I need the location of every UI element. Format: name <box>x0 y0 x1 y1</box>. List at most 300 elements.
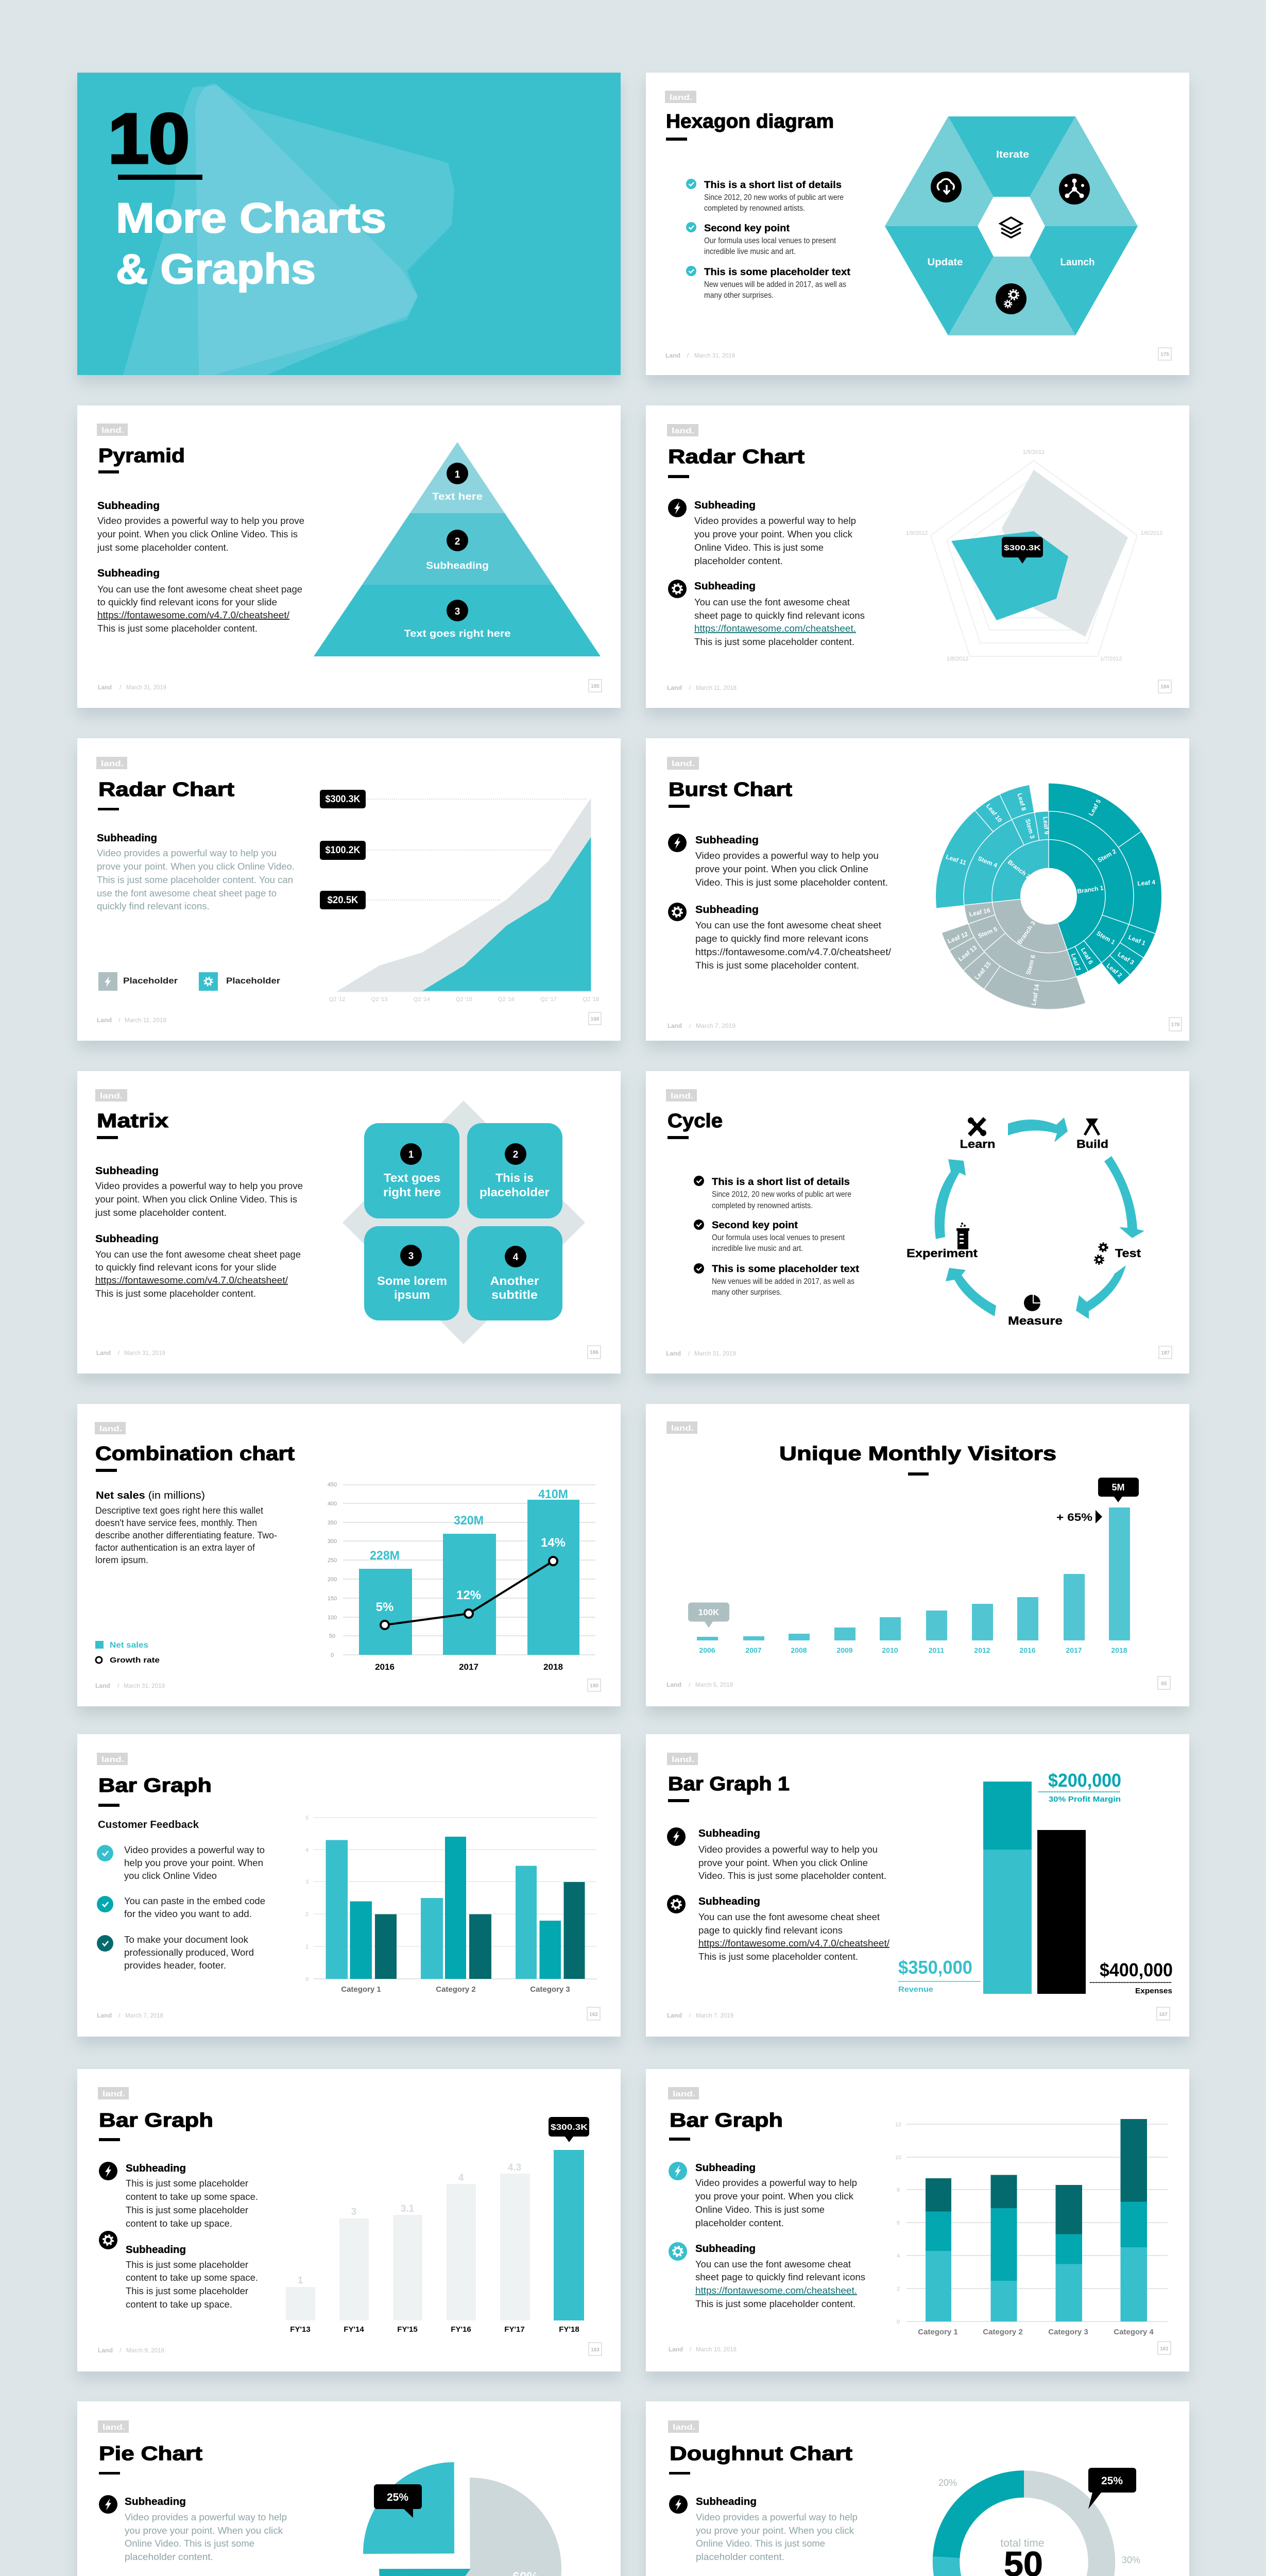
sunburst chart: Branch 3 <box>1016 920 1037 945</box>
text block 1 <box>698 1828 886 1881</box>
logo badge <box>95 1422 126 1434</box>
matrix diagram: 4 <box>513 1252 519 1263</box>
grouped bar chart: 4 <box>305 1847 309 1853</box>
footer <box>667 684 737 691</box>
panel: pyramid <box>77 405 621 708</box>
footer <box>669 2346 737 2353</box>
text block 2: https://fontawesome.com/cheatsheet. <box>694 623 856 634</box>
title underline <box>98 808 119 810</box>
footer <box>668 1022 735 1029</box>
text block 2: This is just some placeholder content. <box>694 636 854 647</box>
cover title: More Charts <box>116 195 386 242</box>
logo badge <box>667 1753 698 1765</box>
text block 1: Subheading <box>125 2496 186 2507</box>
text block 1: you prove your point. When you click <box>696 2525 854 2536</box>
bar chart: 2006 <box>699 1646 715 1654</box>
footer: / <box>119 684 122 691</box>
text block 1: Video provides a powerful way to help you <box>695 850 879 861</box>
logo badge: land. <box>672 1755 694 1764</box>
combo chart: 50 <box>329 1633 335 1639</box>
revenue and expenses bars: $200,000 <box>1048 1770 1121 1791</box>
icon: gear <box>668 580 687 598</box>
logo badge: land. <box>672 427 694 435</box>
footer: Land <box>667 684 682 691</box>
area chart: Q2 '12 <box>329 996 346 1003</box>
title underline <box>669 805 690 808</box>
logo badge <box>96 757 127 769</box>
text block 1: Video provides a powerful way to help <box>696 2512 858 2522</box>
list of details: many other surprises. <box>704 291 774 300</box>
radar chart: $300.3K <box>1004 544 1041 552</box>
list of details: This is some placeholder text <box>704 266 851 278</box>
sunburst chart: Leaf 12 <box>947 930 969 945</box>
text block 2: https://fontawesome.com/cheatsheet. <box>695 2285 857 2296</box>
text block 2: This is just some placeholder content. <box>695 2298 856 2309</box>
footer: March 31, 2019 <box>694 1350 736 1357</box>
matrix diagram: 3 <box>408 1251 414 1262</box>
text block: factor authentication is an extra layer of <box>95 1542 255 1553</box>
title: Bar Graph <box>99 2110 213 2131</box>
logo badge <box>98 2087 129 2099</box>
text block 2 <box>695 904 892 971</box>
grouped bar chart: 3 <box>305 1879 309 1885</box>
text block: prove your point. When you click Online Video. <box>97 861 295 872</box>
title underline <box>669 2138 690 2141</box>
page number <box>588 1346 601 1359</box>
logo badge <box>97 423 128 436</box>
stacked bar chart: 6 <box>897 2220 900 2226</box>
bar chart: $300.3K <box>551 2123 588 2132</box>
text block 1: Subheading <box>694 500 756 511</box>
icon: bolt <box>667 1827 686 1846</box>
title: Pie Chart <box>99 2443 202 2465</box>
text block 2: This is just some placeholder <box>126 2285 248 2296</box>
text block 1: you prove your point. When you click <box>695 2191 854 2201</box>
legend: Placeholder <box>226 976 280 986</box>
stacked bar chart: 8 <box>897 2187 900 2193</box>
logo badge: land. <box>101 759 124 768</box>
footer: / <box>118 1349 120 1357</box>
footer <box>96 1349 165 1357</box>
text block 2: content to take up some space. <box>126 2272 258 2283</box>
logo badge: land. <box>100 1092 123 1100</box>
footer <box>667 2012 733 2019</box>
footer: / <box>119 2347 122 2354</box>
grouped bar chart: 1 <box>305 1944 309 1950</box>
text block 1 <box>125 2496 287 2562</box>
area chart <box>320 790 599 1003</box>
page number <box>1158 2342 1171 2354</box>
footer: / <box>689 684 691 691</box>
cover title <box>116 195 386 293</box>
panel: area radar chart <box>77 738 621 1041</box>
text block 2: Subheading <box>97 568 160 579</box>
panel: pie chart <box>77 2401 621 2576</box>
text block: Descriptive text goes right here this wallet <box>95 1505 263 1516</box>
stacked bar chart: 12 <box>895 2122 901 2128</box>
text block 1: your point. When you click Online Video. This is <box>95 1194 297 1205</box>
checklist: Video provides a powerful way to <box>124 1844 265 1855</box>
text block 2: You can use the font awesome cheat sheet <box>698 1911 880 1922</box>
stacked bar chart <box>895 2119 1168 2336</box>
list of details: Since 2012, 20 new works of public art were <box>704 193 844 202</box>
checklist: you click Online Video <box>124 1870 217 1881</box>
legend <box>95 1641 160 1665</box>
footer: March 11, 2018 <box>696 684 737 691</box>
combo chart: 350 <box>328 1520 337 1526</box>
list of details: Since 2012, 20 new works of public art were <box>712 1190 851 1199</box>
footer: / <box>117 1682 119 1689</box>
text block 2 <box>126 2244 258 2310</box>
combo chart: 14% <box>541 1536 566 1550</box>
text block 1 <box>695 2162 857 2228</box>
sunburst chart: Leaf 14 <box>1030 984 1041 1006</box>
footer: March 9, 2018 <box>126 2347 164 2354</box>
title: Bar Graph <box>98 1775 212 1797</box>
list of details: incredible live music and art. <box>712 1244 803 1253</box>
matrix diagram: 1 <box>408 1149 414 1160</box>
logo badge <box>666 1421 697 1434</box>
list of details: many other surprises. <box>712 1288 782 1297</box>
revenue and expenses bars: Revenue <box>898 1985 933 1994</box>
title: Cycle <box>668 1110 723 1132</box>
decorative translucent shapes <box>123 84 454 375</box>
logo badge <box>95 1089 127 1101</box>
sunburst chart: Stem 4 <box>977 855 999 869</box>
text block 2: Subheading <box>695 2243 756 2255</box>
text block: Subheading <box>97 833 157 844</box>
checklist: provides header, footer. <box>124 1960 226 1971</box>
text block: Video provides a powerful way to help you <box>97 848 277 858</box>
combo chart: 2017 <box>459 1662 478 1672</box>
text block 2: https://fontawesome.com/v4.7.0/cheatsheet/ <box>97 609 290 620</box>
text block 2 <box>97 568 302 634</box>
footer: / <box>118 2012 121 2019</box>
icon: gear <box>99 2231 117 2249</box>
list of details: Second key point <box>712 1219 798 1231</box>
combo chart: 150 <box>328 1596 337 1602</box>
footer: Land <box>666 1350 681 1357</box>
step: build: Build <box>1076 1138 1108 1150</box>
bar chart: 4.3 <box>508 2162 521 2173</box>
combo chart: 410M <box>538 1487 568 1501</box>
text block 1: Video provides a powerful way to help <box>125 2512 287 2522</box>
revenue and expenses bars: $400,000 <box>1100 1959 1173 1980</box>
page number <box>589 1012 601 1025</box>
footer <box>665 352 735 359</box>
revenue and expenses bars: Expenses <box>1135 1987 1172 1995</box>
text block 2: page to quickly find more relevant icons <box>695 933 868 944</box>
page number: 168 <box>591 1016 600 1022</box>
list of details: This is a short list of details <box>704 179 842 191</box>
title: Radar Chart <box>668 446 805 468</box>
text block: This is just some placeholder content. You can <box>97 874 293 885</box>
matrix diagram <box>343 1100 585 1344</box>
footer: March 31, 2019 <box>126 684 166 691</box>
step: test <box>1095 1243 1141 1264</box>
text block 1: Online Video. This is just some <box>695 2204 825 2215</box>
text block 1: your point. When you click Online Video. This is <box>97 529 298 539</box>
bar chart: 1 <box>298 2275 303 2286</box>
matrix diagram: Text goes <box>384 1171 440 1184</box>
bar chart: 100K <box>698 1607 720 1617</box>
text block 1: Video provides a powerful way to help you prove <box>97 515 304 526</box>
grouped bar chart: 2 <box>305 1911 309 1918</box>
footer: Land <box>669 2346 683 2353</box>
icon: bolt <box>669 2495 688 2514</box>
list of details: Our formula uses local venues to present <box>712 1233 845 1242</box>
area chart: $300.3K <box>326 794 361 805</box>
combo chart: 320M <box>454 1514 484 1528</box>
text block 1: Video provides a powerful way to help you prove <box>95 1180 303 1191</box>
text block 2 <box>694 581 865 647</box>
text block 1 <box>696 2496 858 2562</box>
text block 1: content to take up some space. <box>126 2191 258 2202</box>
page number <box>1159 1346 1172 1359</box>
exploded pie chart: 25% <box>387 2492 408 2503</box>
page number <box>1158 680 1171 693</box>
text block 2: This is just some placeholder content. <box>95 1288 256 1299</box>
checklist: help you prove your point. When <box>124 1857 263 1868</box>
pyramid chart: Text goes right here <box>404 629 511 639</box>
list of details: Our formula uses local venues to present <box>704 236 836 245</box>
checklist: for the video you want to add. <box>124 1908 252 1919</box>
page number: 178 <box>1171 1022 1180 1028</box>
text block 1: placeholder content. <box>696 2551 784 2562</box>
text block 1: Video provides a powerful way to help you <box>698 1844 878 1855</box>
logo badge: land. <box>671 1092 693 1100</box>
logo badge <box>668 2420 699 2433</box>
text block 2: Subheading <box>95 1233 159 1245</box>
doughnut chart: 20% <box>938 2478 957 2488</box>
text block 2: You can use the font awesome cheat <box>694 597 850 607</box>
combo chart: 12% <box>456 1588 481 1602</box>
radar chart: 1/7/2012 <box>1100 656 1122 662</box>
text block 2: This is just some placeholder content. <box>97 623 258 634</box>
title: Unique Monthly Visitors <box>779 1443 1056 1465</box>
page number <box>589 680 602 692</box>
logo badge <box>667 424 698 436</box>
bar chart: FY'18 <box>559 2325 579 2334</box>
panel: stacked bar graph <box>646 2069 1189 2371</box>
text block: describe another differentiating feature. Two- <box>95 1530 277 1540</box>
panel: cycle <box>646 1071 1189 1374</box>
title underline <box>669 2472 690 2475</box>
bar chart: + 65% <box>1056 1512 1092 1523</box>
text block 1: Subheading <box>95 1165 159 1177</box>
sunburst chart: Stem 6 <box>1024 954 1037 975</box>
logo badge: land. <box>99 1425 122 1433</box>
title: Pyramid <box>98 445 185 467</box>
text block 2: This is just some placeholder content. <box>695 960 859 971</box>
panel: bar graph fiscal years <box>77 2069 621 2371</box>
text block 2: sheet page to quickly find relevant icons <box>694 610 865 621</box>
icon: gear <box>667 1895 686 1913</box>
bar chart: FY'13 <box>290 2325 311 2334</box>
footer: March 7, 2019 <box>696 1022 735 1029</box>
footer: Land <box>665 352 680 359</box>
step: test: Test <box>1115 1247 1141 1260</box>
step: build <box>1076 1118 1108 1150</box>
text block 1 <box>126 2163 258 2229</box>
stacked bar chart: Category 1 <box>918 2328 958 2336</box>
text block 1: you prove your point. When you click <box>694 529 853 539</box>
combo chart: 100 <box>328 1615 337 1621</box>
footer: Land <box>98 2347 113 2354</box>
footer: March 31, 2019 <box>124 1682 165 1689</box>
matrix diagram: This is <box>495 1171 534 1184</box>
bar chart: 4 <box>458 2173 464 2183</box>
bar chart: 2016 <box>1019 1646 1036 1654</box>
matrix diagram: Some lorem <box>377 1274 447 1287</box>
text block 1: placeholder content. <box>695 2217 784 2228</box>
title underline <box>99 2138 120 2141</box>
panel: hexagon diagram <box>646 73 1189 375</box>
bar chart: FY'15 <box>397 2325 418 2334</box>
cover title: & Graphs <box>116 246 316 293</box>
list of details: New venues will be added in 2017, as well as <box>704 280 846 289</box>
text block 1 <box>97 500 304 553</box>
step: experiment: Experiment <box>906 1247 978 1260</box>
sunburst chart: Leaf 7 <box>1070 953 1082 972</box>
sunburst chart: Leaf 4 <box>1137 878 1156 887</box>
bar chart <box>688 1478 1139 1654</box>
stacked bar chart: 0 <box>897 2319 900 2325</box>
icon: gear <box>669 2242 687 2261</box>
footer <box>98 684 166 691</box>
radar chart <box>906 449 1162 662</box>
footer: Land <box>96 1349 111 1357</box>
hexagon chart: Iterate <box>996 149 1029 160</box>
area chart: Q2 '15 <box>456 996 472 1003</box>
title underline <box>908 1472 929 1476</box>
text block 2: https://fontawesome.com/v4.7.0/cheatsheet/ <box>698 1938 890 1948</box>
bar chart: 2011 <box>929 1646 944 1654</box>
text block 1: Online Video. This is just some <box>125 2538 254 2549</box>
text block 2 <box>695 2243 865 2309</box>
page number: 187 <box>1161 1350 1170 1356</box>
revenue and expenses bars: $350,000 <box>898 1957 972 1978</box>
text block 2: This is just some placeholder content. <box>698 1951 858 1962</box>
sunburst chart: Leaf 2 <box>1105 962 1124 979</box>
page number <box>1169 1018 1182 1031</box>
title: Combination chart <box>95 1443 295 1465</box>
text block <box>97 833 295 911</box>
text block 2: You can use the font awesome cheat sheet <box>695 920 881 930</box>
page number: 184 <box>1160 684 1169 690</box>
bar chart: 2012 <box>974 1646 990 1654</box>
text block 2: https://fontawesome.com/v4.7.0/cheatsheet/ <box>95 1275 288 1285</box>
text block 2: You can use the font awesome cheat sheet page <box>95 1249 301 1260</box>
text block 2: Subheading <box>698 1896 760 1907</box>
text block 1: Online Video. This is just some <box>696 2538 825 2549</box>
matrix diagram: ipsum <box>394 1288 430 1301</box>
bar chart: 2017 <box>1066 1646 1082 1654</box>
text block 1: Subheading <box>696 2496 757 2507</box>
title underline <box>666 138 687 141</box>
combo chart: 450 <box>328 1482 337 1488</box>
list of details: completed by renowned artists. <box>712 1201 813 1210</box>
cycle arrows <box>935 1117 1144 1319</box>
text block 1: Video. This is just some placeholder content. <box>695 877 888 888</box>
text block 2 <box>698 1896 890 1962</box>
title underline <box>668 475 689 478</box>
logo badge: land. <box>673 2423 695 2432</box>
hexagon chart: Update <box>927 257 963 268</box>
text block 1: Video. This is just some placeholder content. <box>698 1870 886 1881</box>
pyramid chart: 2 <box>455 536 460 547</box>
page number <box>1157 2007 1170 2020</box>
grouped bar chart: Category 1 <box>341 1985 381 1994</box>
title underline <box>96 1469 117 1472</box>
text block 1: placeholder content. <box>694 555 783 566</box>
grouped bar chart: Category 3 <box>530 1985 570 1994</box>
text block <box>95 1490 277 1565</box>
icon: bolt <box>669 2162 687 2180</box>
text block 1: just some placeholder content. <box>97 542 229 553</box>
page number: 167 <box>1159 2012 1168 2018</box>
panel: combination chart <box>77 1404 621 1706</box>
text block 1: prove your point. When you click Online <box>698 1857 868 1868</box>
bar chart: 2018 <box>1111 1646 1127 1654</box>
text block 1: Subheading <box>97 500 160 512</box>
text block: doesn't have service fees, monthly. Then <box>95 1517 257 1528</box>
title underline <box>668 1136 689 1139</box>
pyramid chart: Text here <box>432 492 483 502</box>
icon: bolt <box>668 834 687 852</box>
icon: bolt <box>99 2162 117 2180</box>
area chart: Q2 '17 <box>540 996 557 1003</box>
area chart: $20.5K <box>328 895 358 906</box>
text block: quickly find relevant icons. <box>97 901 210 911</box>
step: experiment <box>906 1223 978 1260</box>
panel: matrix <box>77 1071 621 1374</box>
matrix diagram: right here <box>383 1185 441 1199</box>
list of details <box>694 1176 860 1297</box>
text block 2: to quickly find relevant icons for your slide <box>95 1262 277 1273</box>
logo badge <box>97 1753 128 1765</box>
footer: / <box>689 2012 691 2019</box>
page number: 186 <box>590 1350 598 1355</box>
page number: 162 <box>589 2012 598 2018</box>
panel: cover <box>77 73 621 375</box>
list of details <box>686 179 851 300</box>
stacked bar chart: 2 <box>897 2286 900 2292</box>
list of details: incredible live music and art. <box>704 247 796 256</box>
sunburst chart: Stem 1 <box>1095 929 1117 946</box>
doughnut chart: 30% <box>1122 2555 1140 2565</box>
step: measure: Measure <box>1008 1314 1063 1327</box>
text block 2: You can use the font awesome cheat sheet page <box>97 584 302 595</box>
footer: / <box>689 1022 691 1029</box>
matrix diagram: Another <box>490 1274 539 1287</box>
page number: 175 <box>1160 352 1169 358</box>
legend: Net sales <box>110 1641 148 1650</box>
sunburst chart: Leaf 13 <box>957 944 978 963</box>
area chart: Q2 '16 <box>498 996 515 1003</box>
revenue and expenses bars <box>898 1770 1173 1995</box>
footer: Land <box>97 2012 112 2019</box>
legend: Growth rate <box>110 1656 160 1665</box>
title: Hexagon diagram <box>666 111 834 132</box>
footer: Land <box>95 1682 110 1689</box>
logo badge <box>666 1089 697 1101</box>
list of details: This is some placeholder text <box>712 1263 860 1275</box>
grouped bar chart <box>305 1815 597 1994</box>
footer <box>97 2012 163 2019</box>
text block 2 <box>95 1233 301 1299</box>
combo chart: 0 <box>331 1652 334 1658</box>
